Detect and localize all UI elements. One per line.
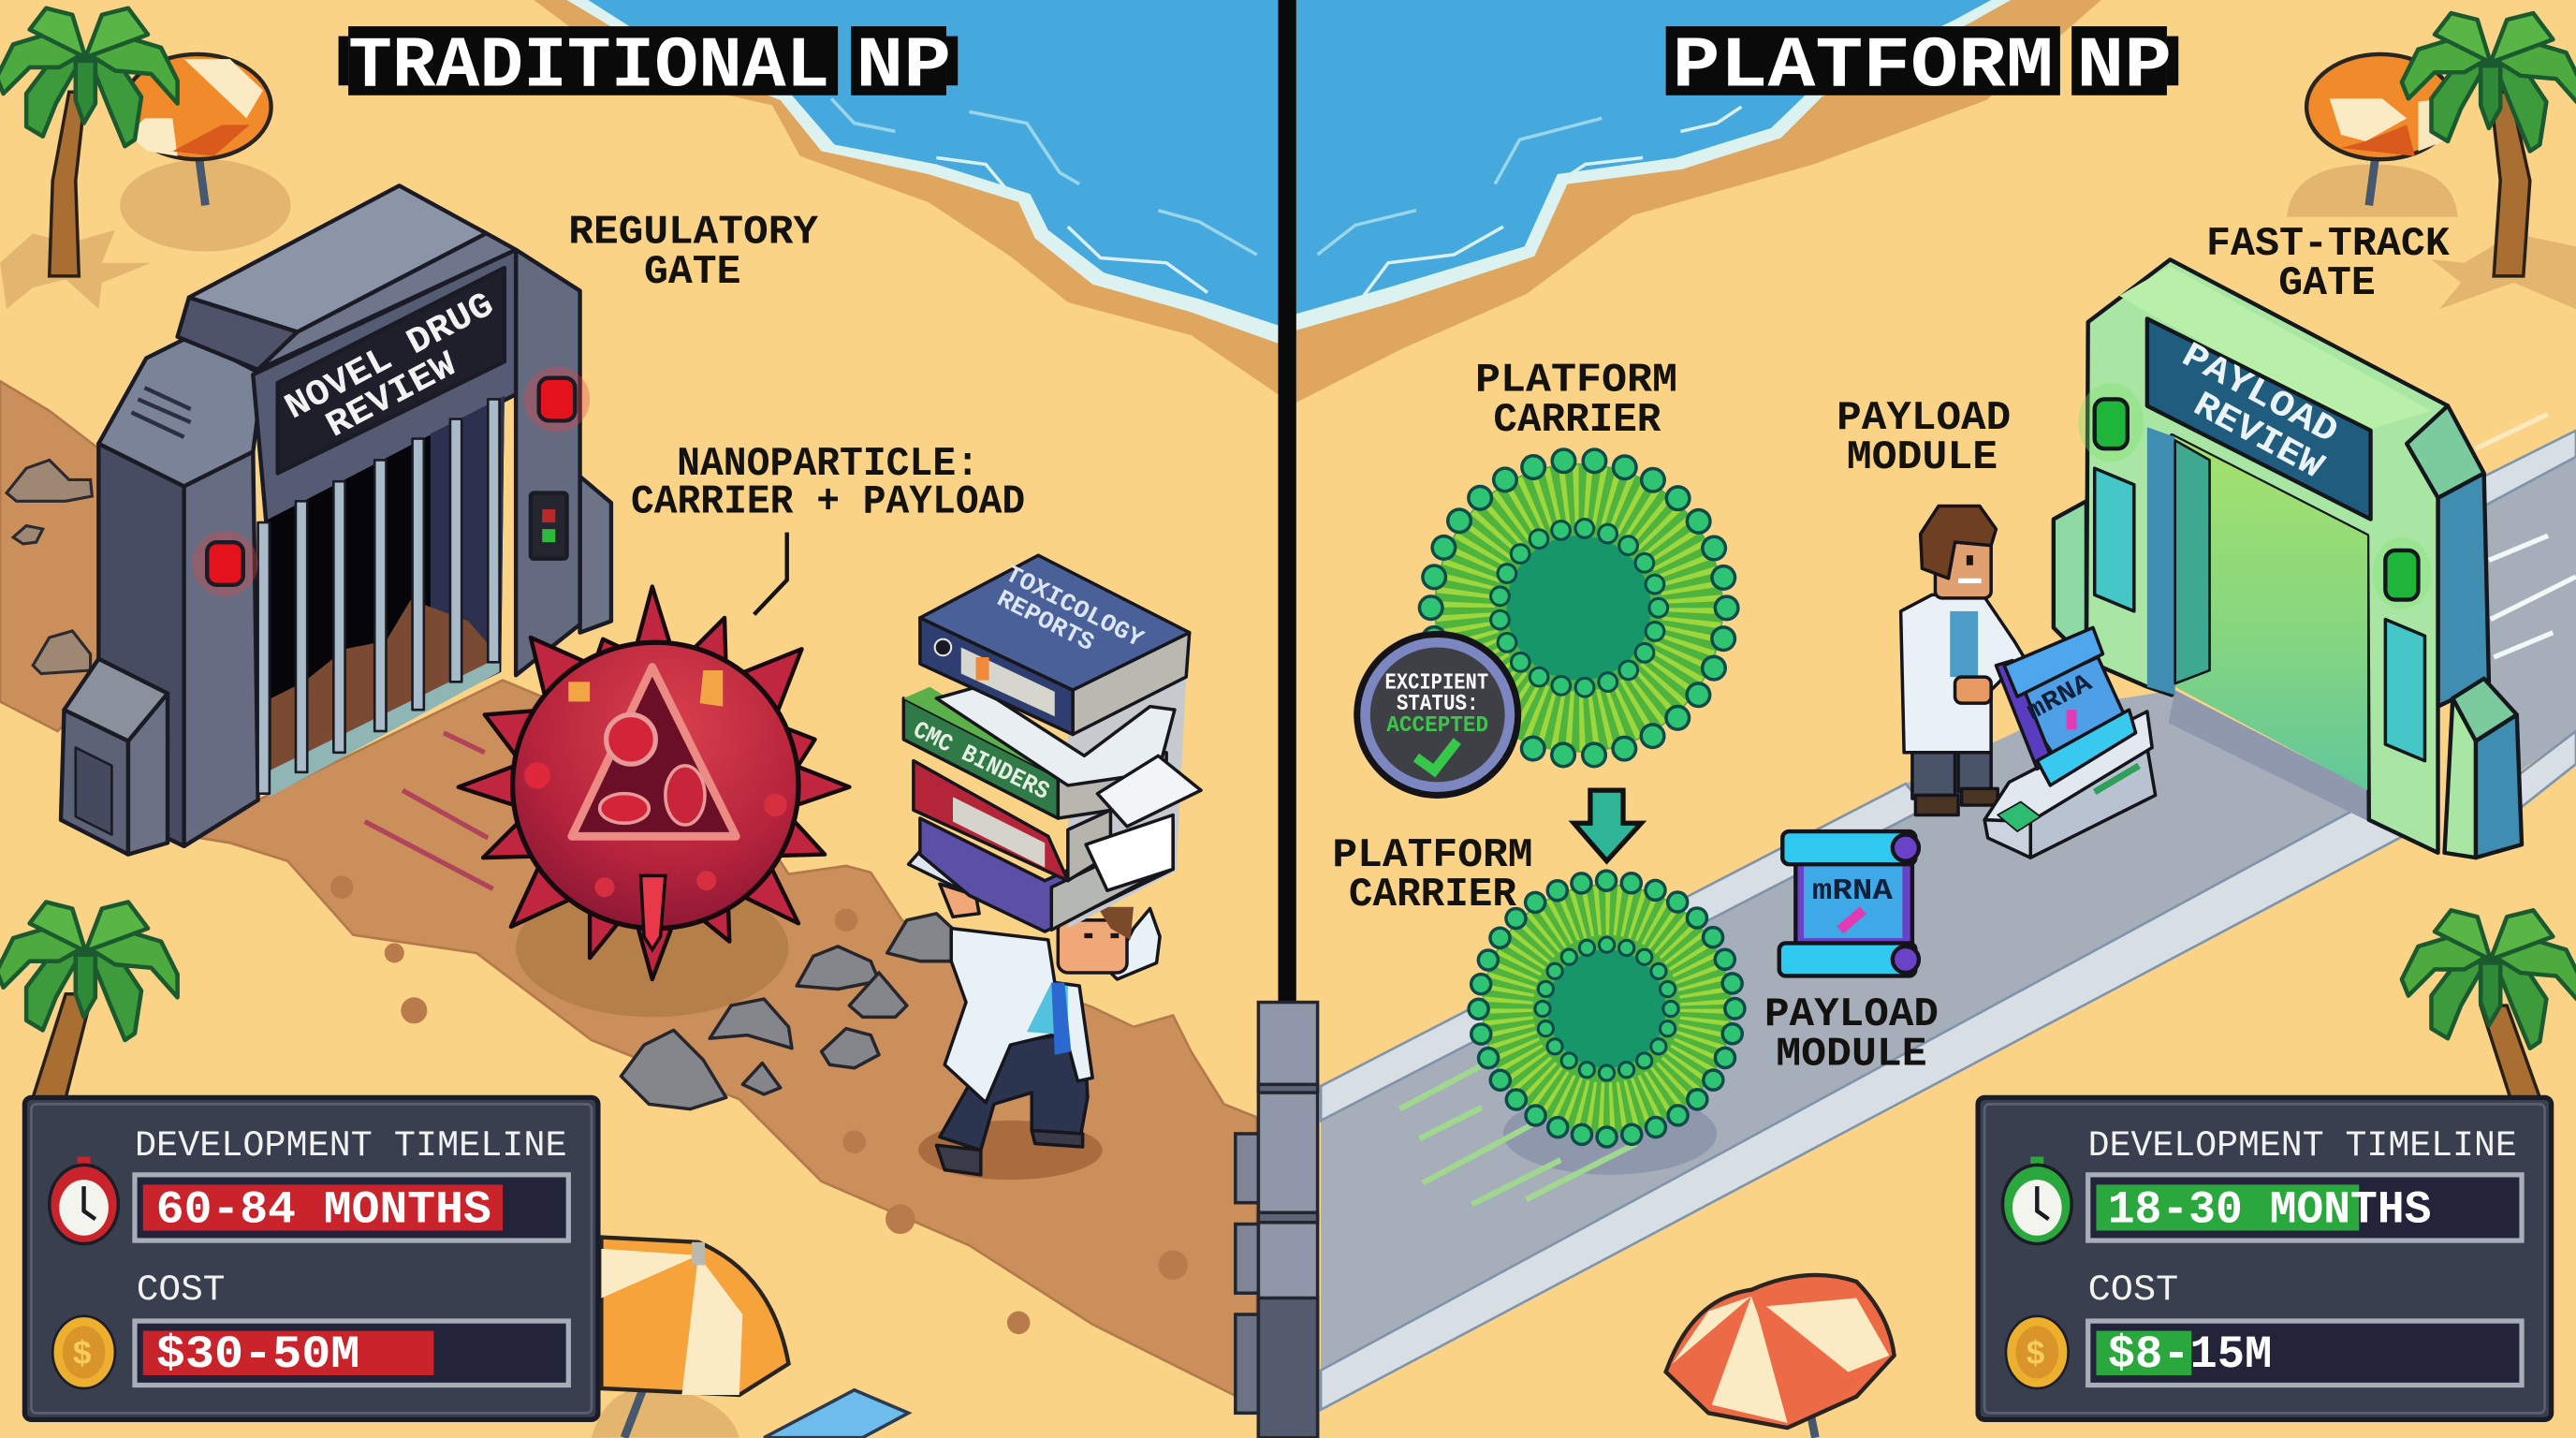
palm tree: bottom right [2402,910,2576,1097]
icon: red clock [50,1157,118,1244]
raised arm [1110,909,1160,979]
label: payload module bottom: PAYLOAD [1764,991,1939,1038]
speed lines [1399,1066,1636,1204]
callout line: nanoparticle [754,533,787,614]
cyan window panels [2095,468,2424,761]
gate sign: REVIEW [319,344,464,447]
stat: timeline bar: 60-84 MONTHS [156,1184,491,1237]
payload module scroll: mRNA [1812,875,1893,908]
umbrella: bottom right [1666,1275,1895,1438]
legs and boots [936,1032,1088,1175]
stat: timeline bar [2088,1175,2522,1240]
label: platform carrier bottom: PLATFORM [1332,832,1532,879]
label: regulatory gate [568,210,819,296]
icon: coin [2006,1316,2069,1388]
panel: platform stats [1978,1097,2552,1419]
label: platform carrier top [1475,358,1677,444]
title: traditional: TRADITIONAL [348,26,829,108]
icon: green clock [2002,1157,2071,1244]
vent [131,388,191,437]
label: nanoparticle: NANOPARTICLE: [677,441,979,488]
road: platform side [1321,690,2415,1410]
nanoparticle [459,587,849,1017]
fast-track gate [2054,259,2522,858]
excipient status badge: EXCIPIENT [1385,670,1488,696]
lab coat [1901,594,2024,753]
stat: cost bar: $30-50M [156,1328,359,1381]
stat: cost bar [135,1321,568,1385]
umbrella: top right [2287,54,2458,217]
green lights [2078,383,2431,609]
stat: cost label: COST [2088,1269,2178,1311]
title: traditional: NP [856,26,951,108]
title: platform: NP [2076,26,2172,108]
base block [2445,679,2522,858]
label: platform carrier top: PLATFORM [1475,358,1677,404]
label: platform carrier bottom: CARRIER [1349,872,1517,918]
dirt clumps [330,875,1188,1334]
title: platform: PLATFORM [1673,26,2054,108]
small rocks on left dirt [7,460,92,674]
scientist with mRNA scroll [1901,506,2156,858]
palm tree: top left [0,8,178,309]
label: regulatory gate: REGULATORY [568,210,819,257]
spikes [459,587,849,979]
scanner machine [1984,712,2156,858]
scroll: mRNA [2023,669,2097,727]
stat: timeline bar: 18-30 MONTHS [2108,1184,2431,1237]
excipient status badge: ACCEPTED [1386,713,1488,739]
label: payload module top [1837,395,2011,481]
grey rocks on the trail [621,914,961,1109]
right ocean and shoreline [1296,0,2101,403]
gate opening [2147,427,2367,790]
gate base block [61,659,168,855]
road continuing behind fast-track gate [2472,414,2576,814]
head [1058,907,1134,973]
beach towel [764,1390,909,1438]
left ocean and shoreline [534,0,1278,394]
umbrella: top left [120,54,291,252]
icon: coin: $ [72,1337,92,1374]
dirt path: left panel [0,381,1257,1406]
platform carrier: top [1431,460,1727,756]
label: fast-track gate: GATE [2278,260,2376,307]
stat: timeline label: DEVELOPMENT TIMELINE [135,1125,567,1167]
gate sign [2147,318,2371,520]
icon: coin [52,1316,115,1388]
binder stack: CMC BINDERS [909,716,1054,806]
title: platform [1666,26,2178,108]
panel: traditional stats [24,1097,598,1419]
center divider [1278,0,1296,1003]
label: platform carrier bottom [1332,832,1532,918]
legs [1912,753,1998,814]
arrow: carrier moves down [1573,790,1641,861]
gate sign [278,268,505,473]
gate sign: PAYLOAD [2174,335,2345,453]
stat: cost bar: $8-15M [2108,1328,2272,1381]
label: payload module top: PAYLOAD [1837,395,2011,442]
hand [940,884,979,917]
gate: regulatory gate [61,185,611,855]
label: nanoparticle [631,441,1025,526]
palm tree: top right [2402,13,2576,309]
head [1921,506,1996,598]
binder stack: REPORTS [992,584,1099,657]
scientist struggling under binders [903,555,1201,1180]
traffic signal box [531,493,567,559]
scroll [1996,627,2136,785]
lab coat [944,929,1092,1103]
gate sign: REVIEW [2187,385,2331,489]
label: regulatory gate: GATE [644,249,741,296]
stone wall divider [1236,1003,1318,1438]
binder stack: TOXICOLOGY [1001,560,1148,653]
stat: cost label: COST [137,1269,225,1311]
gate bars and opening [258,396,505,797]
palm tree: bottom left [0,902,178,1097]
label: payload module bottom: MODULE [1776,1031,1927,1078]
red warning lights [192,366,590,596]
motion lines behind nanoparticle [365,733,493,888]
payload module scroll [1779,831,1919,976]
binder stack [903,555,1201,932]
excipient status badge [1354,631,1521,799]
label: fast-track gate: FAST-TRACK [2206,221,2450,268]
umbrella: bottom left [592,1238,788,1438]
stat: timeline label: DEVELOPMENT TIMELINE [2088,1125,2517,1167]
label: payload module bottom [1764,991,1939,1078]
label: platform carrier top: CARRIER [1493,397,1661,444]
stat: timeline bar [135,1175,568,1240]
excipient status badge: STATUS: [1397,692,1479,717]
gate sign: NOVEL DRUG [278,285,501,429]
stat: cost bar [2088,1321,2522,1385]
platform carrier: rolling on road [1399,881,1734,1204]
icon: coin: $ [2026,1337,2045,1374]
label: fast-track gate [2206,221,2450,307]
shirt and tie [1027,983,1068,1035]
label: nanoparticle: CARRIER + PAYLOAD [631,479,1025,526]
label: payload module top: MODULE [1847,434,1998,481]
